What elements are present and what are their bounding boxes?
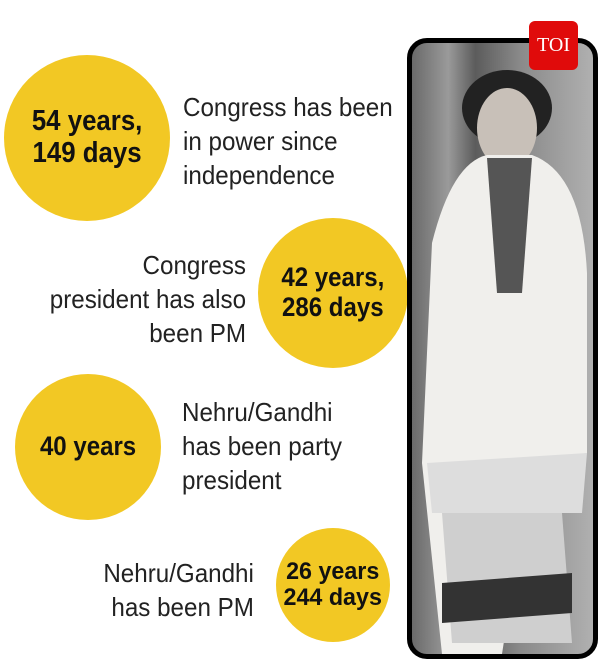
logo: TOI: [529, 21, 578, 70]
text: Nehru/Gandhi PM: [103, 558, 254, 622]
circle: 26 years: 26 years: [286, 558, 380, 585]
text: congress president PM: Congress: [143, 250, 246, 280]
circle: 26 years: [276, 528, 390, 642]
photo frame: [407, 38, 598, 659]
text: Nehru/Gandhi party president: [182, 397, 342, 495]
logo: TOI: TOI: [537, 34, 570, 56]
text: congress in power: independence: [183, 160, 335, 190]
circle: 40 years: 40 years: [40, 431, 136, 461]
text: congress in power: [183, 92, 393, 190]
text: Nehru/Gandhi PM: Nehru/Gandhi: [103, 558, 254, 588]
text: Nehru/Gandhi PM: has been PM: [112, 592, 254, 622]
figure: shawl: [422, 155, 587, 654]
text: Nehru/Gandhi party president: has been party: [182, 431, 342, 461]
circle: 40 years: [15, 374, 161, 520]
text: Nehru/Gandhi party president: president: [182, 465, 281, 495]
text: congress in power: in power since: [183, 126, 338, 156]
circle: 26 years: 244 days: [284, 584, 382, 611]
circle: 54 years: 54 years,: [32, 105, 142, 137]
circle: 42 years: [258, 218, 408, 368]
text: congress in power: Congress has been: [183, 92, 393, 122]
circle: 42 years: 42 years,: [282, 262, 384, 292]
circle: 54 years: 149 days: [32, 137, 142, 169]
text: congress president PM: been PM: [149, 318, 246, 348]
circle: 42 years: 286 days: [282, 292, 384, 322]
text: congress president PM: [50, 250, 246, 348]
text: Nehru/Gandhi party president: Nehru/Gandhi: [182, 397, 333, 427]
figure: head: [462, 70, 552, 168]
circle: 54 years: [4, 55, 170, 221]
text: congress president PM: president has also: [50, 284, 246, 314]
